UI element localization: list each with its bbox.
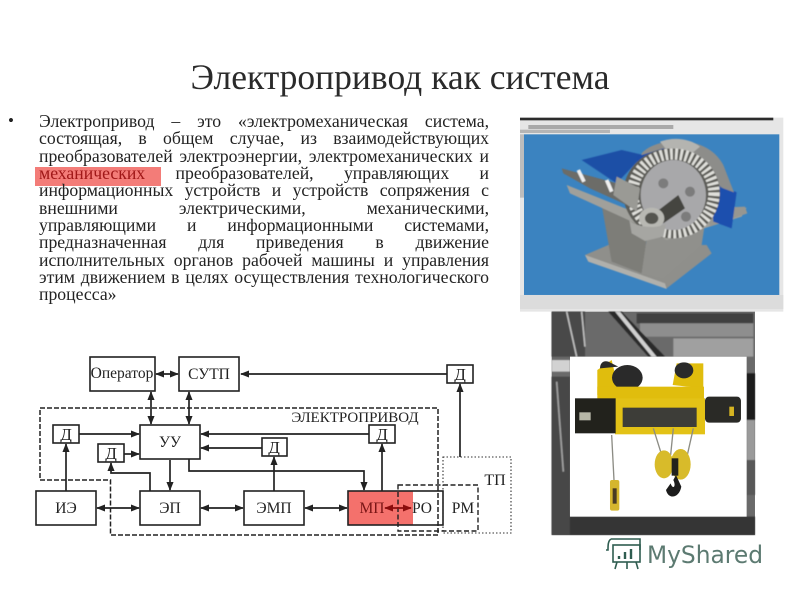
block Д right <box>369 425 395 444</box>
text block: definition: внешними электрическими, механическими, <box>39 198 489 218</box>
block СУТП: СУТП <box>188 366 230 383</box>
block Д middle <box>262 438 287 457</box>
red arrow МП РО <box>385 507 411 509</box>
block Д left 2 <box>98 444 124 463</box>
label ЭЛЕКТРОПРИВОД: ЭЛЕКТРОПРИВОД <box>291 410 419 426</box>
text block: definition: исполнительных органов рабочей машины и управления <box>39 250 489 270</box>
block ЭП <box>140 491 200 525</box>
blue viewport <box>524 134 779 295</box>
block ЭП: ЭП <box>159 500 181 517</box>
block ИЭ: ИЭ <box>55 500 77 517</box>
housing <box>642 141 734 192</box>
block МП РО <box>348 491 443 525</box>
label РМ: РМ <box>452 500 474 517</box>
gearbox drawing <box>562 139 747 289</box>
block Д left 1 <box>53 425 79 444</box>
block Оператор: Оператор <box>91 365 154 382</box>
text block: definition: управляющими и информационными системами, <box>39 215 489 235</box>
grey workshop background <box>552 312 755 535</box>
block Д left 1: Д <box>60 425 72 444</box>
logo: MyShared <box>606 539 763 569</box>
image: crane hoist photo <box>552 312 755 535</box>
text block: definition: процесса» <box>39 284 117 304</box>
ring gear <box>623 148 720 238</box>
logo icon <box>606 539 640 569</box>
block ИЭ <box>36 491 96 525</box>
block УУ <box>140 425 200 459</box>
dashed frame РО РМ <box>398 485 478 531</box>
text block: definition: преобразователей электроэнергии, электромеханических и <box>39 146 489 166</box>
text block: definition: этим движением в целях осуществления технологического <box>39 267 489 287</box>
text block: definition: предназначенная для приведения в движение <box>39 232 489 252</box>
block diagram: electric drive <box>36 357 511 535</box>
blue plates <box>582 150 643 183</box>
connection arrows <box>66 374 460 508</box>
output shaft <box>657 195 685 223</box>
process dotted frame <box>443 457 511 533</box>
electric drive dashed frame <box>40 408 438 535</box>
highlight on word <box>35 167 161 186</box>
block Д left 2: Д <box>105 444 117 463</box>
block Д middle: Д <box>268 438 280 457</box>
text block: definition: механических преобразователей, управляющих и <box>39 163 489 183</box>
block ЭМП: ЭМП <box>256 500 292 517</box>
base plate <box>585 245 712 288</box>
bullet: • <box>8 111 14 130</box>
block Оператор <box>90 357 155 391</box>
text block: definition: Электропривод – это «электромеханическая система, <box>39 111 489 131</box>
text block: definition <box>39 111 489 304</box>
title: Электропривод как система <box>191 57 609 97</box>
input shaft <box>562 168 627 205</box>
block УУ: УУ <box>159 434 181 451</box>
red highlight МП <box>348 491 413 525</box>
block ЭМП <box>244 491 304 525</box>
logo text: MyShared <box>647 541 763 569</box>
block МП РО: РО <box>412 500 432 517</box>
text block: definition: информационных устройств и устройств сопряжения с <box>39 180 489 200</box>
block Д top right: Д <box>454 365 466 384</box>
label ТП: ТП <box>484 472 506 489</box>
white photo card <box>570 357 747 517</box>
pedestal <box>602 205 648 273</box>
block МП РО: МП <box>360 500 384 517</box>
image: gearbox CAD window <box>520 118 783 312</box>
block Д top right <box>447 365 473 384</box>
flange <box>567 185 747 240</box>
block Д right: Д <box>376 425 388 444</box>
block СУТП <box>179 357 239 391</box>
text block: definition: состоящая, в общем случае, из взаимодействующих <box>39 128 489 148</box>
